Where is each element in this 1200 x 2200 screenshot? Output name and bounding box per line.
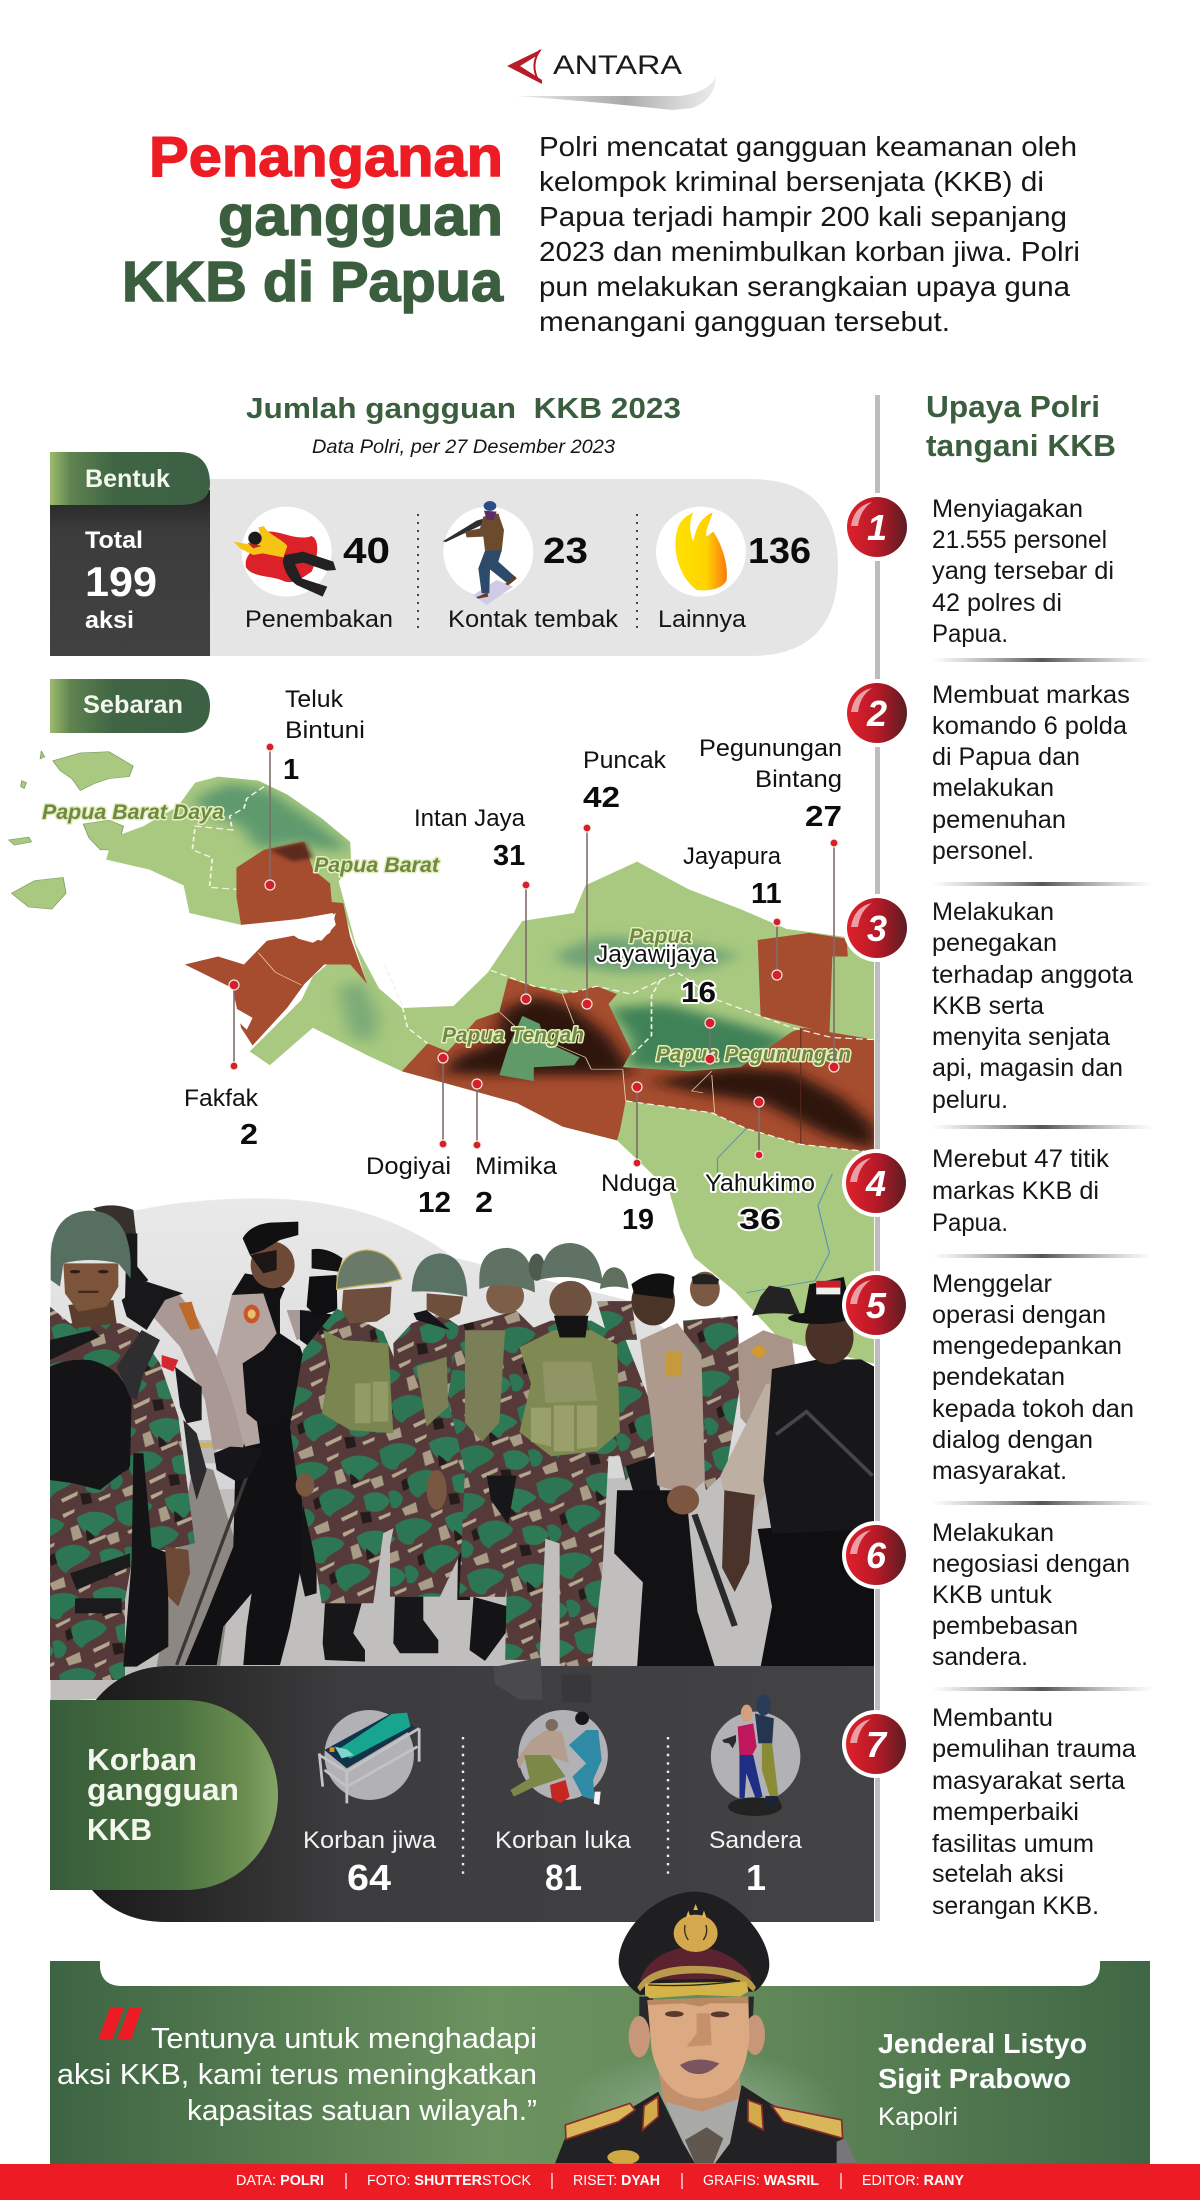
dark relief <box>442 996 874 1150</box>
region names: Papua Barat <box>314 854 440 877</box>
timeline line <box>875 395 880 1921</box>
region names: Papua Tengah <box>442 1024 584 1047</box>
map labels: 16 <box>681 977 716 1009</box>
photo: pasukan TNI-Polri <box>50 1198 874 1701</box>
numbers: 81 <box>545 1857 582 1898</box>
total text: 199 <box>85 558 157 605</box>
soldier: loreng 1 <box>290 1249 404 1662</box>
text 2 <box>932 681 1130 865</box>
text 2: komando 6 polda <box>932 712 1127 740</box>
map leader lines <box>229 743 839 1167</box>
region names: Papua <box>629 925 692 948</box>
text 1: yang tersebar di <box>932 557 1114 585</box>
text 1: 21.555 personel <box>932 526 1107 554</box>
map labels: 12 <box>418 1187 451 1219</box>
text 6 <box>932 1519 1130 1671</box>
tab: Bentuk <box>50 452 210 505</box>
badge 2: 2 <box>866 693 887 734</box>
quote text: Tentunya untuk menghadapi <box>151 2023 537 2055</box>
text 3: penegakan <box>932 929 1057 957</box>
total text <box>85 527 157 634</box>
soldier: loreng 2 <box>390 1253 471 1653</box>
heading: Upaya Polri: tangani KKB <box>926 428 1116 463</box>
mainland <box>106 777 874 1364</box>
tab: Sebaran: Sebaran <box>83 691 183 719</box>
district borders <box>258 953 715 1113</box>
map labels: Dogiyai <box>366 1153 451 1180</box>
badge 7: 7 <box>866 1724 888 1765</box>
credits <box>236 2172 964 2189</box>
tab label: Bentuk <box>85 465 170 493</box>
text 4 <box>932 1145 1110 1237</box>
step 2 <box>843 679 1130 865</box>
step 4 <box>842 1145 1110 1237</box>
soldier: depan kiri <box>50 1211 195 1680</box>
text 7: fasilitas umum <box>932 1830 1094 1858</box>
label text <box>87 1742 239 1847</box>
text 4: markas KKB di <box>932 1177 1099 1205</box>
text 2: melakukan <box>932 774 1054 802</box>
text 2: personel. <box>932 837 1034 865</box>
credits: GRAFIS: WASRIL <box>703 2172 819 2189</box>
text 3: menyita senjata <box>932 1023 1110 1051</box>
map labels: 19 <box>622 1204 654 1236</box>
heading: Upaya Polri: Upaya Polri <box>926 389 1100 424</box>
text 7: pemulihan trauma <box>932 1735 1136 1763</box>
dark panel background <box>50 1666 874 1922</box>
map landmass <box>9 751 874 1364</box>
panel: korban gangguan KKB <box>50 1657 874 1922</box>
map labels: Jayapura <box>683 843 782 870</box>
logo: ANTARA <box>507 49 716 110</box>
map labels: 27 <box>805 801 842 833</box>
text 5: Menggelar <box>932 1270 1052 1298</box>
text 3: peluru. <box>932 1086 1008 1114</box>
text 3 <box>932 898 1133 1114</box>
provincial borders <box>192 787 874 1152</box>
map labels: Pegunungan <box>699 735 842 762</box>
total text: aksi <box>85 607 134 634</box>
map labels: 2 <box>475 1187 493 1219</box>
text 7: Membantu <box>932 1704 1053 1732</box>
badge 4: 4 <box>865 1163 886 1204</box>
text 7: setelah aksi <box>932 1860 1064 1888</box>
label text: KKB <box>87 1812 152 1847</box>
left group of figures <box>50 1205 471 1680</box>
region names <box>42 801 851 1066</box>
police far right <box>738 1286 800 1424</box>
intro paragraph: pun melakukan serangkaian upaya guna <box>539 271 1070 302</box>
badge 4 <box>842 1149 910 1217</box>
text 7: serangan KKB. <box>932 1892 1099 1920</box>
text 7 <box>932 1704 1136 1920</box>
map labels: Bintang <box>755 766 842 793</box>
soldier: polisi tengah <box>177 1222 310 1665</box>
badge 5: 5 <box>866 1285 887 1326</box>
text 3: Melakukan <box>932 898 1054 926</box>
text 7: memperbaiki <box>932 1798 1079 1826</box>
badge 6 <box>842 1521 910 1589</box>
title: gangguan <box>218 184 503 248</box>
text 5: mengedepankan <box>932 1332 1122 1360</box>
map labels: Bintuni <box>285 717 365 744</box>
intro paragraph: 2023 dan menimbulkan korban jiwa. Polri <box>539 236 1080 267</box>
soldier: loreng 3 <box>448 1248 637 1661</box>
intro paragraph <box>539 131 1080 337</box>
region names: Papua Barat Daya <box>42 801 224 824</box>
text 3: terhadap anggota <box>932 961 1133 989</box>
portrait: Listyo Sigit Prabowo <box>555 1892 857 2165</box>
map labels: Fakfak <box>184 1085 259 1112</box>
green label pill <box>50 1700 278 1890</box>
badge 3 <box>843 894 911 962</box>
badge 7 <box>842 1710 910 1778</box>
total box <box>50 490 210 656</box>
map labels: 42 <box>583 782 620 814</box>
map labels: 36 <box>739 1204 781 1236</box>
rivers <box>718 1129 832 1293</box>
icon: korban penembakan <box>234 507 336 597</box>
green quote band <box>50 1961 1150 2164</box>
map: sebaran Papua <box>9 679 874 1364</box>
map labels: 31 <box>493 840 525 872</box>
badge 1: 1 <box>867 507 887 548</box>
soldier: topi rimba <box>720 1277 874 1667</box>
panel: bentuk <box>50 452 838 656</box>
gravel <box>157 1463 237 1667</box>
icon: korban luka <box>510 1710 608 1805</box>
logo: ANTARA: ANTARA <box>553 50 682 80</box>
region names: Papua Pegunungan <box>656 1043 851 1066</box>
step 5 <box>842 1270 1134 1485</box>
tab: Sebaran <box>50 679 210 733</box>
text 5: masyarakat. <box>932 1457 1067 1485</box>
text 6: sandera. <box>932 1643 1028 1671</box>
intro paragraph: Papua terjadi hampir 200 kali sepanjang <box>539 201 1067 232</box>
text 2: Membuat markas <box>932 681 1130 709</box>
panel: kutipan <box>50 1892 1150 2170</box>
green enclave: Papua Tengah <box>499 1016 580 1081</box>
text 1: Menyiagakan <box>932 495 1083 523</box>
map labels: Jayawijaya <box>596 941 717 968</box>
soldier: belakang kiri <box>93 1205 245 1500</box>
badge 2 <box>843 679 911 747</box>
road <box>50 1476 772 1700</box>
quote text <box>57 2023 537 2127</box>
total text: Total <box>85 527 143 554</box>
intro paragraph: Polri mencatat gangguan keamanan oleh <box>539 131 1077 162</box>
intro paragraph: menangani gangguan tersebut. <box>539 306 950 337</box>
photo backdrop and rear figures <box>51 1198 874 1701</box>
step 3 <box>843 894 1133 1114</box>
map labels: Puncak <box>583 747 667 774</box>
badge 3: 3 <box>867 908 887 949</box>
text 5: pendekatan <box>932 1363 1065 1391</box>
icon: kontak tembak <box>443 501 533 605</box>
heading: Upaya Polri <box>926 389 1116 463</box>
quote mark <box>98 2008 142 2040</box>
icon: sandera <box>711 1694 800 1816</box>
right group of figures <box>448 1243 874 1672</box>
name: Kapolri <box>878 2103 958 2131</box>
soldier boots overlap <box>494 1657 591 1703</box>
labels: Korban jiwa <box>303 1827 437 1854</box>
map labels: 11 <box>751 878 782 910</box>
soldier: utama <box>487 1243 660 1672</box>
footer credit bar <box>0 2164 1200 2200</box>
map labels: Intan Jaya <box>414 805 526 832</box>
soldier: polisi kanan <box>614 1273 735 1666</box>
text 3: KKB serta <box>932 992 1044 1020</box>
step 1 <box>843 493 1114 648</box>
quote text: aksi KKB, kami terus meningkatkan <box>57 2059 537 2091</box>
map labels: Nduga <box>601 1170 677 1197</box>
text 5: dialog dengan <box>932 1426 1093 1454</box>
label: Lainnya: Lainnya <box>658 606 747 633</box>
map labels: 2 <box>240 1119 258 1151</box>
text 1: 42 polres di <box>932 589 1062 617</box>
sky <box>50 1198 746 1490</box>
grey pill <box>200 479 838 656</box>
quote text: kapasitas satuan wilayah.” <box>187 2095 537 2127</box>
map labels: 1 <box>283 754 299 786</box>
text 5 <box>932 1270 1134 1485</box>
soldier: belakang kanan <box>683 1272 740 1490</box>
map labels <box>184 686 842 1236</box>
text 1 <box>932 495 1114 648</box>
brown districts <box>185 842 874 1152</box>
text 4: Papua. <box>932 1209 1008 1237</box>
text 3: api, magasin dan <box>932 1054 1123 1082</box>
heading: Jumlah gangguan <box>246 393 681 458</box>
label: Penembakan: Penembakan <box>245 606 393 633</box>
text 6: Melakukan <box>932 1519 1054 1547</box>
numbers: 64 <box>347 1857 391 1898</box>
credits: RISET: DYAH <box>573 2172 660 2189</box>
text 7: masyarakat serta <box>932 1767 1125 1795</box>
labels <box>303 1827 803 1854</box>
label: Kontak tembak: Kontak tembak <box>448 606 619 633</box>
label text: gangguan <box>87 1772 239 1807</box>
numbers <box>347 1857 766 1898</box>
text 5: operasi dengan <box>932 1301 1106 1329</box>
name: Jenderal Listyo <box>878 2028 1087 2059</box>
credits: FOTO: SHUTTERSTOCK <box>367 2172 531 2189</box>
number: 40: 40 <box>343 530 390 571</box>
label text: Korban <box>87 1742 197 1777</box>
islands <box>9 751 133 909</box>
name <box>878 2028 1087 2131</box>
heading: Jumlah gangguan: Data Polri, per 27 Desember 2023 <box>312 437 615 458</box>
badge 6: 6 <box>866 1535 887 1576</box>
icon: api <box>656 507 746 597</box>
numbers: 1 <box>746 1857 766 1898</box>
title: Penanganan <box>149 125 503 189</box>
credits: EDITOR: RANY <box>862 2172 964 2189</box>
map labels: Yahukimo <box>705 1170 815 1197</box>
green relief <box>195 783 792 1071</box>
credits: DATA: POLRI <box>236 2172 324 2189</box>
soldier: masked <box>287 1249 343 1357</box>
text 6: negosiasi dengan <box>932 1550 1130 1578</box>
bay <box>290 913 336 943</box>
rear trousers <box>300 1502 317 1597</box>
step 6 <box>842 1519 1130 1671</box>
title: KKB di Papua <box>122 250 504 314</box>
text 6: KKB untuk <box>932 1581 1052 1609</box>
number: 136: 136 <box>748 530 811 571</box>
badge 1 <box>843 493 911 561</box>
name: Sigit Prabowo <box>878 2063 1071 2094</box>
text 5: kepada tokoh dan <box>932 1395 1134 1423</box>
badge 5 <box>842 1271 910 1339</box>
text 6: pembebasan <box>932 1612 1078 1640</box>
heading: Jumlah gangguan: Jumlah gangguan KKB 2023 <box>246 393 681 425</box>
step 7 <box>842 1704 1136 1920</box>
title <box>122 125 504 314</box>
intro paragraph: kelompok kriminal bersenjata (KKB) di <box>539 166 1044 197</box>
map labels: Teluk <box>285 686 344 713</box>
text 1: Papua. <box>932 620 1008 648</box>
labels: Sandera <box>709 1827 803 1854</box>
icon: korban jiwa <box>319 1710 419 1803</box>
labels: Korban luka <box>495 1827 632 1854</box>
text 2: pemenuhan <box>932 806 1066 834</box>
map labels: Mimika <box>475 1153 558 1180</box>
number: 23: 23 <box>543 530 588 571</box>
text 4: Merebut 47 titik <box>932 1145 1110 1173</box>
text 2: di Papua dan <box>932 743 1080 771</box>
